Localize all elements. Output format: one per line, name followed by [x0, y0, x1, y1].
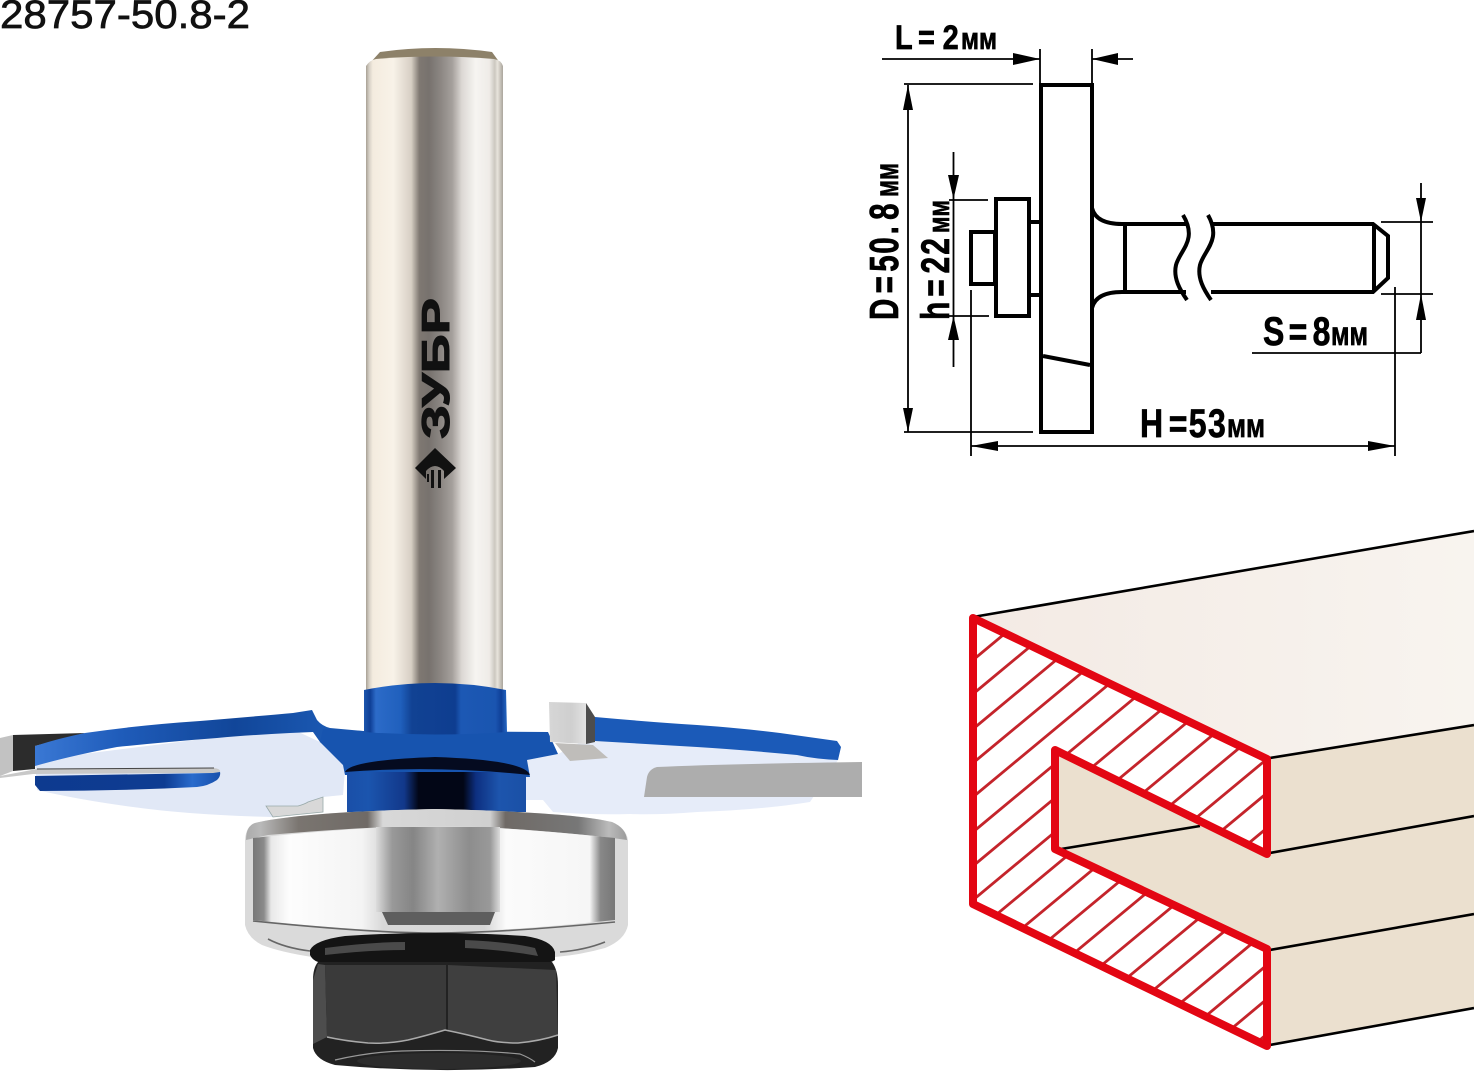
- left cutting plate (pale underside): [35, 728, 345, 817]
- technical dimension drawing: [861, 18, 1433, 456]
- label: L = 2 mm: [895, 18, 997, 57]
- router bit photo illustration: [0, 48, 862, 1070]
- cross-section hatching: [977, 636, 1263, 1040]
- brand logo mark: [415, 448, 456, 488]
- bearing centre reflection: [376, 827, 500, 912]
- hex nut: [313, 962, 558, 1070]
- dimension lines: [882, 49, 1433, 456]
- upper side face: [1270, 725, 1474, 853]
- label: h = 22 mm: [914, 200, 958, 320]
- bearing lower shadow band: [382, 912, 495, 925]
- dimension arrowheads: [903, 53, 1426, 451]
- upper right carbide tooth: [549, 702, 608, 761]
- drawing: cutter outline: [971, 85, 1388, 432]
- right large carbide insert: [644, 762, 862, 797]
- label: D = 50.8 mm: D=50.8: [861, 203, 907, 320]
- dark arc above core: [345, 757, 530, 775]
- bearing: [245, 809, 628, 957]
- left blue wing rim: [35, 710, 363, 766]
- label: h = 22 mm: мм: [921, 200, 956, 233]
- label: S = 8 mm: S=8: [1263, 309, 1330, 354]
- nut left bevel: [313, 964, 327, 1044]
- label: D = 50.8 mm: мм: [868, 163, 905, 197]
- bearing lower edge lines: [253, 921, 615, 952]
- top face of board: [973, 531, 1474, 758]
- left lower slot with carbide strip: [0, 768, 220, 791]
- brand name on shank: ЗУБР: [415, 298, 458, 439]
- label: L = 2 mm: мм: [961, 21, 997, 56]
- bearing silhouette: [245, 809, 628, 957]
- black washer: [310, 933, 555, 964]
- nut end ring: [335, 1050, 535, 1062]
- shank chamfer line: [1372, 224, 1376, 292]
- label: S = 8 mm: мм: [1331, 315, 1368, 352]
- board edge lines: [973, 531, 1474, 1045]
- label: h = 22 mm: h=22: [914, 238, 958, 320]
- groove interior: [1055, 750, 1474, 950]
- label: H = 53 mm: [1140, 401, 1265, 446]
- break curve left: [1175, 215, 1189, 300]
- shank with break marks: [1092, 208, 1388, 308]
- blue collar: [364, 683, 507, 734]
- bearing body: [253, 826, 615, 932]
- label: L = 2 mm: L=2: [895, 18, 959, 57]
- cutting disc: [1041, 85, 1092, 432]
- shank step line: [1123, 224, 1127, 292]
- label: H = 53 mm: H=53: [1140, 401, 1226, 446]
- dark blue spindle core: [347, 772, 526, 812]
- nut: [971, 232, 995, 284]
- lower side face: [1270, 914, 1474, 1045]
- spacer: [1029, 222, 1041, 295]
- cross-section fill: [973, 618, 1267, 1046]
- break curve right: [1199, 215, 1213, 300]
- right cutting plate (pale underside): [525, 735, 838, 814]
- small lower tooth behind bearing: [266, 797, 323, 817]
- wood joint profile illustration: [969, 530, 1474, 1050]
- label: H = 53 mm: мм: [1227, 407, 1265, 444]
- label: S = 8 mm: [1263, 309, 1368, 354]
- nut thread hole: [357, 1053, 521, 1069]
- nut right face: [448, 965, 558, 1043]
- shank end cap: [370, 48, 500, 63]
- nut left face: [325, 965, 446, 1043]
- nut chamfer highlight: [327, 1030, 558, 1043]
- cross-section red outline: [973, 618, 1267, 1046]
- nut silhouette: [313, 962, 558, 1070]
- disc tooth line: [1043, 356, 1090, 365]
- steel shank: [366, 56, 503, 692]
- bearing: [996, 199, 1029, 316]
- right blue wing rim: [595, 717, 841, 760]
- bearing top bevel: [246, 809, 627, 840]
- centre blue band: [320, 729, 558, 777]
- left carbide tooth: [0, 733, 85, 776]
